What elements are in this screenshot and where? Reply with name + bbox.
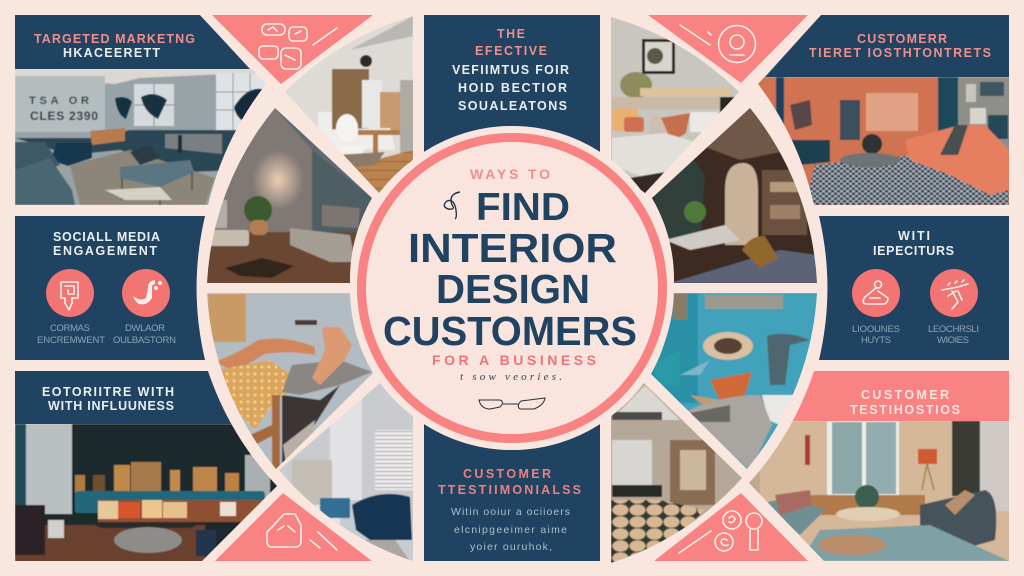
- caption left: [852, 324, 900, 346]
- panel: social media engagement: [15, 216, 205, 360]
- heading: WITI: [898, 229, 930, 243]
- pink triangle: top left icons: [212, 15, 373, 84]
- heading: ENGAGEMENT: [53, 244, 157, 258]
- eyebrow: WAYS TO: [470, 166, 550, 182]
- photo: bedroom with orange bed: [205, 293, 380, 473]
- caption right: DWLAOR: [125, 323, 165, 334]
- handwritten note: t sow veories.: [460, 371, 562, 383]
- heading: [475, 27, 547, 58]
- photo: beige lounge: [745, 421, 1010, 563]
- title: INTERIOR: [408, 225, 617, 271]
- caption right: OULBASTORN: [113, 335, 176, 346]
- photo: cream bedroom: [610, 15, 745, 200]
- body: SOUALEATONS: [458, 99, 567, 113]
- icon: hanger: [852, 269, 900, 317]
- panel: customer testimonials bottom right: [745, 371, 1015, 563]
- heading: CUSTOMER: [861, 388, 949, 402]
- caption left: ENCREMWENT: [37, 335, 105, 346]
- title: DESIGN: [436, 266, 590, 312]
- heading: CUSTOMERR: [857, 32, 947, 46]
- icon: document: [46, 269, 94, 317]
- heading: SOCIALL MEDIA: [53, 230, 160, 244]
- heading: THE: [497, 27, 525, 41]
- heading: [873, 229, 954, 258]
- photo: white study: [285, 15, 415, 200]
- heading: [438, 467, 581, 497]
- heading: [809, 34, 990, 57]
- header band: [745, 15, 1015, 77]
- pink triangle: top right icon: [648, 15, 808, 83]
- panel: bottom centre testimonials: [424, 424, 600, 561]
- body: yoier ouruhok,: [470, 541, 552, 553]
- subtitle: FOR A BUSINESS: [432, 352, 596, 368]
- heading: TARGETED MARKETNG: [34, 32, 195, 46]
- title: FIND: [476, 186, 570, 229]
- white clip shape: [764, 15, 821, 77]
- heading: [53, 230, 160, 258]
- heading: TTESTIIMONIALSS: [438, 483, 581, 497]
- title: [383, 186, 637, 354]
- heading: IEPECITURS: [873, 244, 954, 258]
- photo: loft with tiled floor: [610, 380, 745, 565]
- header band: [15, 371, 232, 424]
- body: [451, 506, 570, 553]
- body: VEFIIMTUS FOIR: [452, 63, 569, 77]
- caption right: [928, 324, 979, 346]
- caption left: LIOOUNES: [852, 324, 900, 335]
- centre badge: [350, 126, 674, 450]
- panel: influencers: [15, 371, 280, 565]
- body: HOID BECTIOR: [458, 81, 567, 95]
- photo: grey living room: [15, 69, 270, 205]
- wall lettering: TSA OR: [29, 95, 89, 107]
- body: elcnipgeeimer aime: [454, 524, 567, 536]
- caption left: HUYTS: [861, 335, 891, 346]
- caption right: [113, 323, 176, 346]
- heading: [42, 387, 174, 410]
- icon: target: [680, 25, 756, 62]
- caption left: CORMAS: [50, 323, 90, 334]
- panel: top centre effective: [424, 15, 600, 152]
- panel: with lepecturs: [819, 216, 1009, 360]
- panel: customer testimonials top right: [745, 15, 1015, 207]
- body: Witin ooiur a ociioers: [451, 506, 570, 518]
- photo: warm grey lounge: [207, 108, 372, 283]
- heading: TESTIHOSTIOS: [850, 403, 960, 417]
- heading: HKACEERETT: [63, 46, 160, 60]
- icon: ampersand scribble: [444, 192, 460, 219]
- wall lettering: CLES 2390: [30, 109, 98, 123]
- heading: TIERET IOSTHTONTRETS: [809, 46, 991, 60]
- title: CUSTOMERS: [383, 308, 637, 354]
- photo: teal wall room: [650, 293, 820, 473]
- heading: EFECTIVE: [475, 44, 547, 58]
- heading: [850, 390, 960, 414]
- body: [452, 63, 569, 113]
- caption left: [37, 323, 105, 346]
- icon: glasses: [479, 398, 545, 409]
- photo: coral room: [745, 77, 1010, 207]
- heading: WITH INFLUUNESS: [48, 399, 174, 413]
- pink triangle: bottom right icons: [654, 493, 808, 561]
- photo: dark arched room: [650, 105, 820, 285]
- icon: leaf burst: [930, 269, 978, 317]
- pink triangle: bottom left clock icon: [215, 493, 372, 561]
- icon: social f: [122, 269, 170, 317]
- wall lettering: [28, 96, 98, 120]
- heading: EOTORIITRE WITH: [42, 385, 174, 399]
- caption right: WIOIES: [937, 335, 969, 346]
- icon: clock: [267, 514, 337, 550]
- icon: doodle circles: [679, 511, 762, 553]
- icon: doodle boxes: [259, 24, 337, 69]
- header band: [780, 371, 1015, 421]
- photo: dark lounge with teal sofa: [15, 424, 280, 565]
- photo: white room with blue chair: [279, 383, 413, 561]
- panel: targeted marketing: [15, 15, 270, 205]
- heading: [34, 34, 194, 57]
- heading: CUSTOMER: [463, 467, 551, 481]
- caption right: LEOCHRSLI: [928, 324, 979, 335]
- header band: [15, 15, 250, 69]
